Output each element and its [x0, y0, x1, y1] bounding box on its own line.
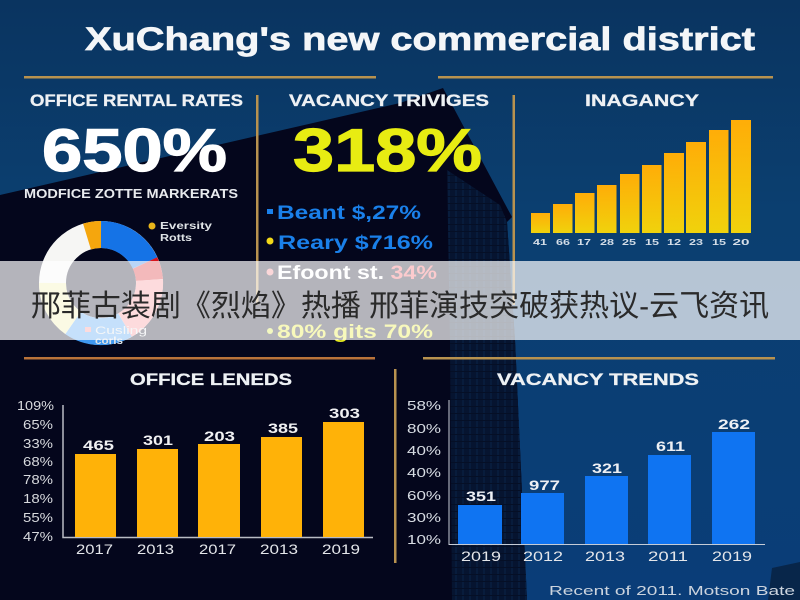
x axis labels: 2017: [199, 542, 236, 557]
bar labels: 25: [622, 237, 636, 247]
y axis labels: 60%: [407, 488, 442, 503]
y axis labels: 47%: [23, 530, 53, 544]
y axis labels: 58%: [407, 398, 442, 413]
y axis labels: 18%: [23, 492, 53, 506]
y axis labels: 33%: [23, 437, 53, 451]
bars: [531, 120, 751, 233]
bar labels: 17: [577, 237, 591, 247]
y axis labels: 65%: [23, 418, 53, 432]
source note: Recent of 2011. Motson Bate: [549, 583, 795, 598]
y axis labels: 40%: [407, 465, 442, 480]
heading: inagancy: INAGANCY: [585, 91, 700, 110]
banner: headline overlay: [0, 261, 800, 340]
legend: top: Eversity: [160, 221, 213, 232]
axes: [63, 405, 373, 538]
bar labels: 66: [556, 237, 570, 247]
bullet list: Reary $716%: [278, 233, 433, 254]
x axis labels: [461, 549, 752, 564]
bar values: [466, 416, 750, 504]
bar values: [83, 405, 360, 453]
bar labels: 12: [667, 237, 681, 247]
y axis labels: 40%: [407, 443, 442, 458]
banner: headline overlay: 邢菲古装剧《烈焰》热播 邢菲演技突破获热议-云飞资讯: [31, 290, 769, 323]
y axis labels: [17, 399, 54, 544]
x axis labels: 2012: [523, 549, 563, 564]
y axis labels: 109%: [17, 399, 54, 413]
bar values: 385: [268, 420, 298, 436]
heading: office rental rates: OFFICE RENTAL RATES: [30, 91, 243, 110]
title: XuChang's new commercial district: [85, 21, 755, 57]
bottom dividers: [24, 357, 775, 563]
x axis labels: 2013: [137, 542, 174, 557]
y axis labels: 10%: [407, 532, 442, 547]
bar values: 611: [656, 438, 685, 454]
x axis labels: [76, 542, 360, 557]
heading: vacancy trends: VACANCY TRENDS: [497, 370, 699, 389]
big number: 318%: 318%: [293, 117, 482, 184]
bar values: 351: [466, 488, 496, 504]
legend: top: [148, 221, 213, 244]
legend: bottom: corls: [95, 336, 124, 347]
legend: bottom: [85, 325, 147, 347]
top dividers: [24, 76, 773, 305]
heading: office leneds: OFFICE LENEDS: [130, 370, 292, 389]
bar labels: 15: [645, 237, 659, 247]
bar labels: 41: [533, 237, 547, 247]
bar values: 303: [329, 405, 360, 421]
bar labels: 20: [732, 237, 750, 247]
axes: [449, 400, 765, 544]
bar labels: 23: [689, 237, 703, 247]
y axis labels: 80%: [407, 421, 442, 436]
y axis labels: 30%: [407, 510, 442, 525]
panel: inagancy bar chart: [531, 91, 751, 247]
bar values: 977: [529, 477, 560, 493]
panel: office rental rates: [24, 91, 243, 347]
bullet list: 80% gits 70%: [277, 322, 433, 343]
panel: office lenders chart: [17, 370, 373, 557]
big number: 650%: 650%: [42, 117, 227, 184]
x axis labels: 2017: [76, 542, 113, 557]
bar values: 203: [204, 428, 235, 444]
bar labels: [533, 237, 750, 247]
bars: [458, 432, 755, 544]
bullet list: Beant $,27%: [277, 203, 421, 224]
x axis labels: 2019: [461, 549, 501, 564]
legend: bottom: Cusling: [95, 325, 147, 337]
heading: vacancy: VACANCY TRIVIGES: [289, 91, 489, 110]
bars: [75, 422, 364, 537]
y axis labels: 68%: [23, 455, 53, 469]
bar values: 262: [718, 416, 750, 432]
bar values: 321: [592, 460, 622, 476]
x axis labels: 2019: [712, 549, 752, 564]
bar labels: 15: [712, 237, 726, 247]
x axis labels: 2019: [322, 542, 360, 557]
bullet list: [266, 203, 437, 343]
x axis labels: 2013: [585, 549, 625, 564]
y axis labels: 55%: [23, 511, 53, 525]
panel: vacancy trends chart: [407, 370, 765, 564]
legend: top: Rotts: [160, 233, 193, 244]
bar values: 301: [143, 432, 173, 448]
x axis labels: 2011: [648, 549, 688, 564]
x axis labels: 2013: [260, 542, 298, 557]
bar values: 465: [83, 437, 114, 453]
subheading: market: MODFICE ZOTTE MARKERATS: [24, 186, 238, 201]
bullet list: Efoont st. 34%: [277, 263, 437, 284]
y axis labels: 78%: [23, 473, 53, 487]
bar labels: 28: [600, 237, 614, 247]
panel: vacancy: [266, 91, 489, 343]
y axis labels: [407, 398, 442, 547]
donut chart: [52, 234, 150, 332]
